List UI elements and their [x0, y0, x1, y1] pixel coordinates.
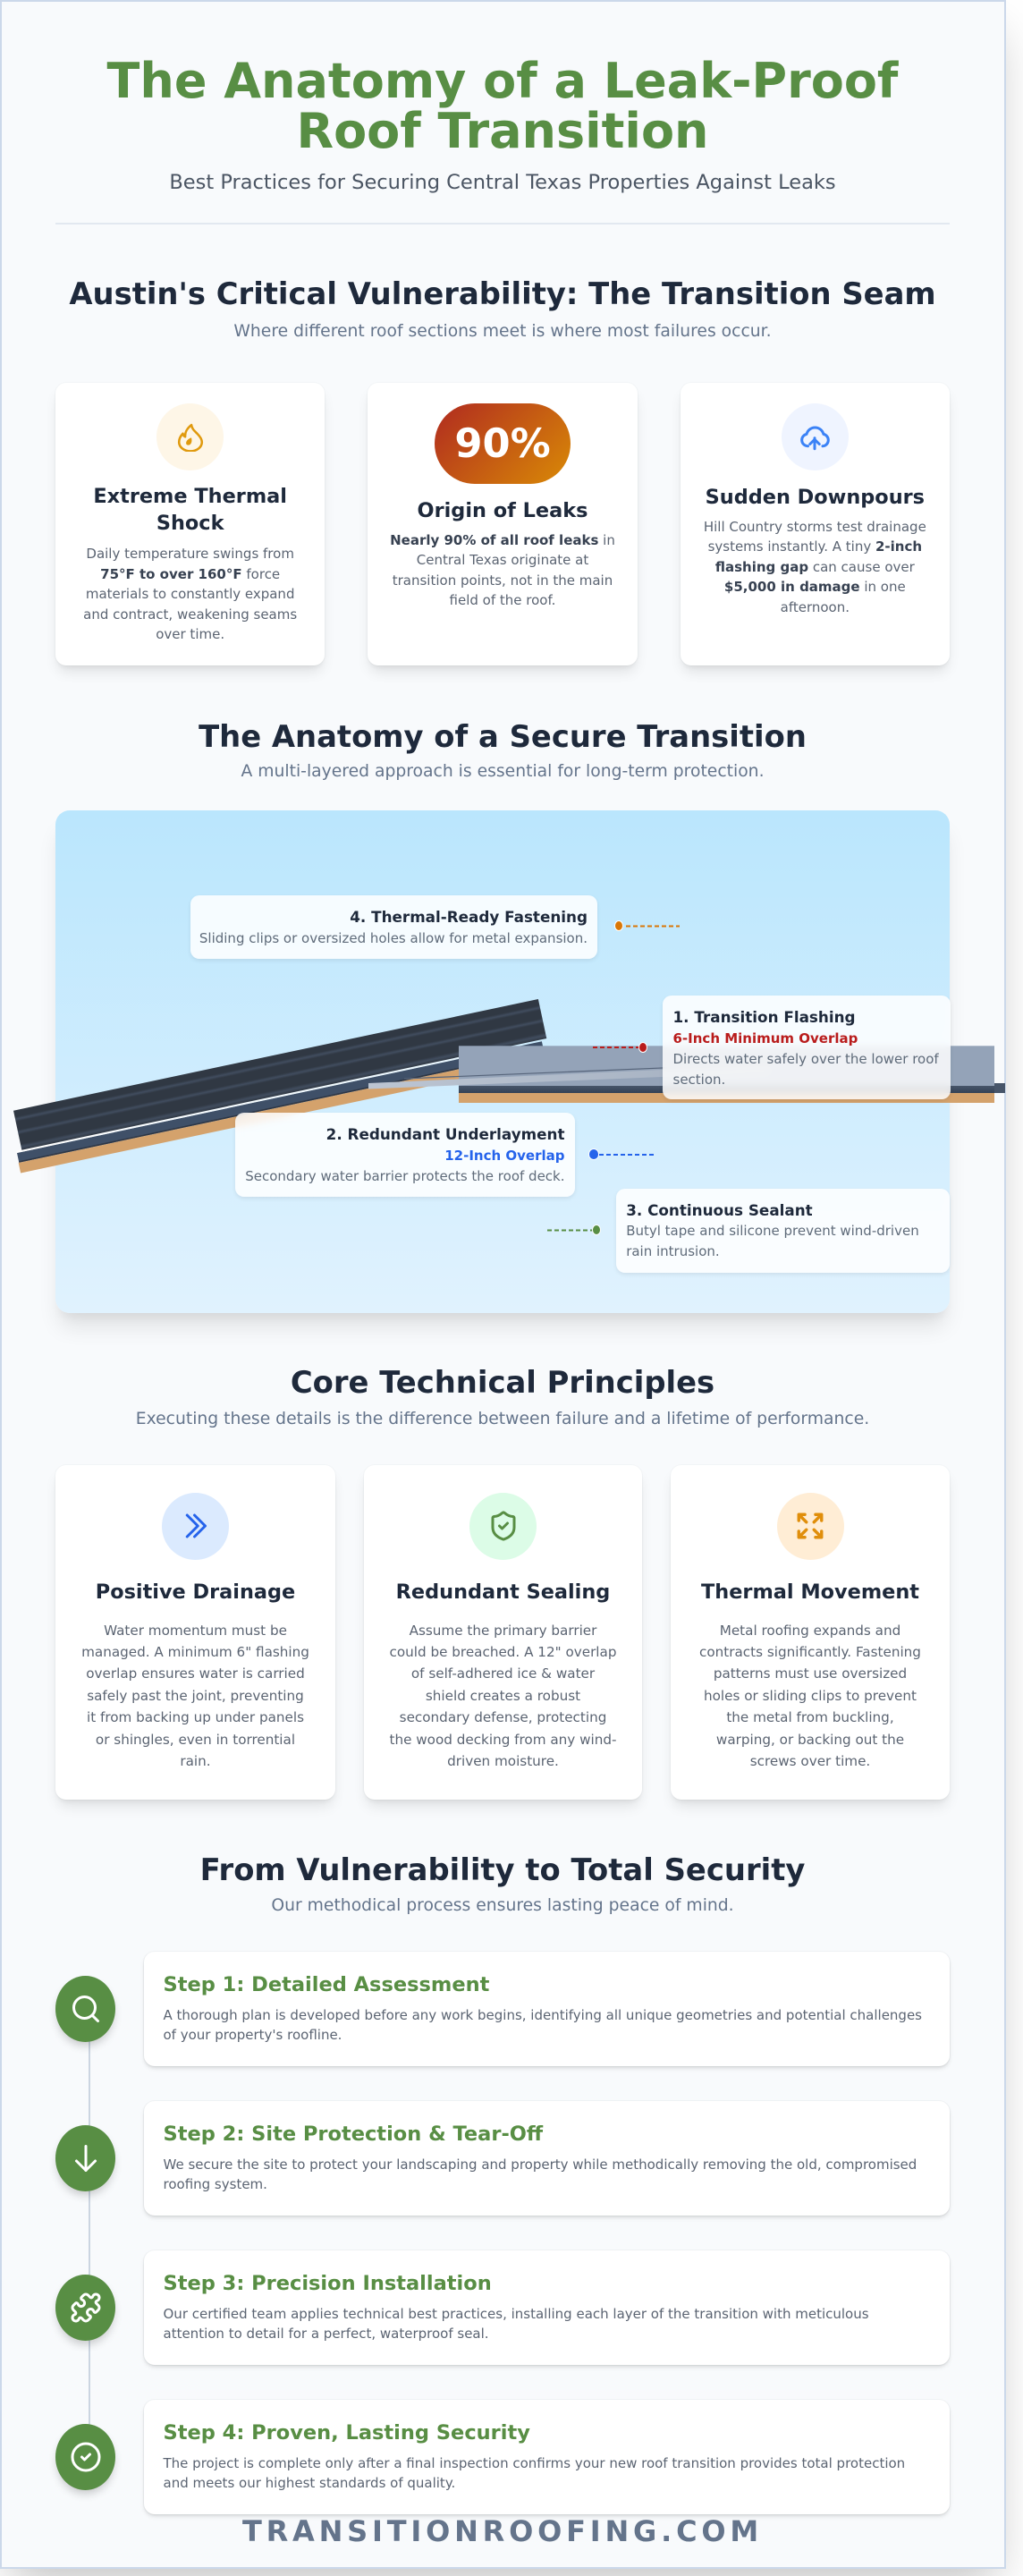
section intro: transition seam: Where different roof sections meet is where most failures occur.	[233, 322, 772, 340]
card text: transition points, not in the main	[393, 572, 613, 589]
step text	[163, 2007, 922, 2043]
card text: secondary defense, protecting	[400, 1709, 606, 1725]
icon: circle check	[72, 2442, 100, 2472]
section intro: total security: Our methodical process ensures lasting peace of mind.	[271, 1896, 734, 1915]
icon: expand arrows	[776, 1492, 844, 1560]
card text: holes or sliding clips to prevent	[704, 1688, 917, 1704]
card heading: Shock	[156, 512, 224, 535]
callout: transition flashing	[663, 996, 950, 1099]
leader line: fastening	[622, 925, 680, 927]
callout text	[626, 1223, 919, 1259]
card: thermal movement	[671, 1465, 950, 1800]
heading: secure transition: The Anatomy of a Secure Transition	[199, 719, 807, 754]
card text: rain.	[180, 1753, 211, 1769]
card text: of self-adhered ice & water	[411, 1665, 595, 1682]
card text: $5,000 in damage in one	[724, 579, 906, 595]
step heading: Step 3: Precision Installation	[163, 2272, 492, 2295]
title: Roof Transition	[296, 103, 708, 159]
callout: thermal-ready fastening	[190, 895, 597, 959]
step text	[163, 2157, 917, 2192]
card text: Metal roofing expands and	[720, 1623, 900, 1639]
card text: the wood decking from any wind-	[390, 1732, 616, 1748]
card text: managed. A minimum 6" flashing	[81, 1644, 309, 1660]
step 1 marker	[55, 1976, 115, 2042]
stat: 90%	[435, 403, 571, 484]
callout text: Sliding clips or oversized holes allow for metal expansion.	[199, 930, 588, 946]
step text: The project is complete only after a final inspection confirms your new roof transition provides total protection	[163, 2455, 905, 2471]
callout text	[672, 1051, 939, 1088]
callout text: rain intrusion.	[626, 1243, 720, 1259]
card text: Water momentum must be	[104, 1623, 287, 1639]
subtitle: Best Practices for Securing Central Texas Properties Against Leaks	[169, 171, 836, 194]
card text: field of the roof.	[450, 592, 555, 608]
card text: contracts significantly. Fastening	[699, 1644, 921, 1660]
card text	[390, 1623, 616, 1769]
timeline line	[89, 2009, 90, 2457]
callout text: Secondary water barrier protects the roof deck.	[245, 1168, 565, 1184]
card text: driven moisture.	[447, 1753, 559, 1769]
card text: the metal from buckling,	[726, 1709, 894, 1725]
card text: Central Texas originate at	[417, 552, 588, 568]
callout highlight: 12-Inch Overlap	[444, 1148, 565, 1164]
step 3 marker	[55, 2275, 115, 2341]
heading: total security: From Vulnerability to Total Security	[200, 1852, 805, 1887]
icon: puzzle piece	[72, 2293, 100, 2322]
title	[107, 53, 899, 159]
card: origin of leaks	[368, 383, 638, 665]
card text: warping, or backing out the	[716, 1732, 904, 1748]
step 2 card	[143, 2101, 950, 2216]
card text: Nearly 90% of all roof leaks in	[390, 532, 615, 548]
callout: redundant underlayment	[235, 1113, 574, 1197]
card heading: Redundant Sealing	[396, 1580, 610, 1604]
card text: and contract, weakening seams	[83, 606, 297, 623]
callout heading: 1. Transition Flashing	[672, 1008, 856, 1026]
callout heading: 3. Continuous Sealant	[626, 1201, 813, 1219]
stat: 90%: 90%	[454, 419, 551, 467]
leader line: sealant	[547, 1229, 592, 1231]
card text: Assume the primary barrier	[410, 1623, 596, 1639]
card text	[704, 519, 926, 615]
card text: flashing gap can cause over	[715, 559, 915, 575]
card: positive drainage	[55, 1465, 335, 1800]
marker: fastening	[613, 920, 622, 931]
card text: 75°F to over 160°F force	[100, 565, 280, 581]
step 4 card	[143, 2400, 950, 2514]
step text: A thorough plan is developed before any work begins, identifying all unique geometries and potential challenges	[163, 2007, 922, 2023]
step 4 marker	[55, 2424, 115, 2490]
card text: over time.	[156, 626, 224, 642]
step text	[163, 2306, 869, 2342]
step heading: Step 1: Detailed Assessment	[163, 1973, 489, 1996]
card: redundant sealing	[364, 1465, 642, 1800]
section intro: core principles: Executing these details is the difference between failure and a lifetime of performance.	[136, 1410, 869, 1428]
title: The Anatomy of a Leak-Proof	[107, 53, 898, 109]
icon: flame	[156, 403, 224, 470]
step heading: Step 2: Site Protection & Tear-Off	[163, 2123, 543, 2146]
section intro: secure transition: A multi-layered approach is essential for long-term protection.	[241, 762, 765, 781]
step text	[163, 2455, 905, 2491]
icon: chevrons	[162, 1492, 229, 1560]
callout text: section.	[672, 1072, 725, 1088]
step text: and meets our highest standards of quality.	[163, 2475, 455, 2491]
step text: We secure the site to protect your landscaping and property while methodically removing the old, compromised	[163, 2157, 917, 2173]
card text: safely past the joint, preventing	[87, 1688, 304, 1704]
icon: shield check	[469, 1492, 537, 1560]
card heading: Positive Drainage	[96, 1580, 295, 1604]
step text: roofing system.	[163, 2176, 267, 2192]
heading: transition seam: Austin's Critical Vulnerability: The Transition Seam	[69, 276, 936, 311]
callout highlight: 6-Inch Minimum Overlap	[672, 1030, 858, 1046]
callout text: Directs water safely over the lower roof	[672, 1051, 939, 1067]
heading: core principles: Core Technical Principles	[291, 1365, 714, 1400]
card text: systems instantly. A tiny 2-inch	[708, 538, 922, 555]
step text: attention to detail for a perfect, waterproof seal.	[163, 2326, 489, 2342]
card text: materials to constantly expand	[86, 586, 294, 602]
step heading: Step 4: Proven, Lasting Security	[163, 2421, 530, 2445]
footer brand: TRANSITIONROOFING.COM	[242, 2514, 763, 2548]
card text	[699, 1623, 921, 1769]
card text: Daily temperature swings from	[86, 546, 294, 562]
card text: Hill Country storms test drainage	[704, 519, 926, 535]
card text: afternoon.	[781, 599, 850, 615]
card text	[83, 546, 297, 642]
card text: screws over time.	[750, 1753, 870, 1769]
marker: underlayment	[588, 1148, 599, 1160]
step text: of your property's roofline.	[163, 2027, 342, 2043]
panel: roof diagram background	[55, 810, 950, 1313]
leader line: underlayment	[599, 1154, 654, 1156]
leader line: flashing	[593, 1046, 638, 1048]
step 2 marker	[55, 2125, 115, 2191]
card: extreme thermal shock	[55, 383, 325, 665]
card text	[390, 532, 615, 608]
icon: cloud with rain	[782, 403, 849, 470]
marker: flashing	[638, 1041, 647, 1052]
card heading: Origin of Leaks	[418, 499, 588, 522]
step 1 card	[143, 1952, 950, 2066]
callout text: Butyl tape and silicone prevent wind-driven	[626, 1223, 919, 1239]
callout: continuous sealant	[616, 1189, 950, 1272]
icon: magnifier	[72, 1996, 100, 2023]
step text: Our certified team applies technical best practices, installing each layer of the transition with meticulous	[163, 2306, 869, 2322]
card heading: Sudden Downpours	[706, 486, 925, 509]
card text	[81, 1623, 309, 1769]
diagram: roof cross-section layers	[13, 999, 1005, 1174]
marker: sealant	[592, 1224, 601, 1235]
card text: shield creates a robust	[426, 1688, 580, 1704]
card heading: Thermal Movement	[701, 1580, 919, 1604]
card text: could be breached. A 12" overlap	[390, 1644, 616, 1660]
card text: it from backing up under panels	[87, 1709, 304, 1725]
card text: overlap ensures water is carried	[86, 1665, 305, 1682]
card: sudden downpours	[681, 383, 950, 665]
icon: arrow down	[75, 2145, 97, 2172]
card text: patterns must use oversized	[714, 1665, 907, 1682]
card text: or shingles, even in torrential	[96, 1732, 295, 1748]
callout heading: 2. Redundant Underlayment	[326, 1125, 565, 1143]
step 3 card	[143, 2250, 950, 2365]
card heading	[93, 485, 287, 535]
card heading: Extreme Thermal	[93, 485, 287, 508]
callout heading: 4. Thermal-Ready Fastening	[350, 908, 588, 926]
